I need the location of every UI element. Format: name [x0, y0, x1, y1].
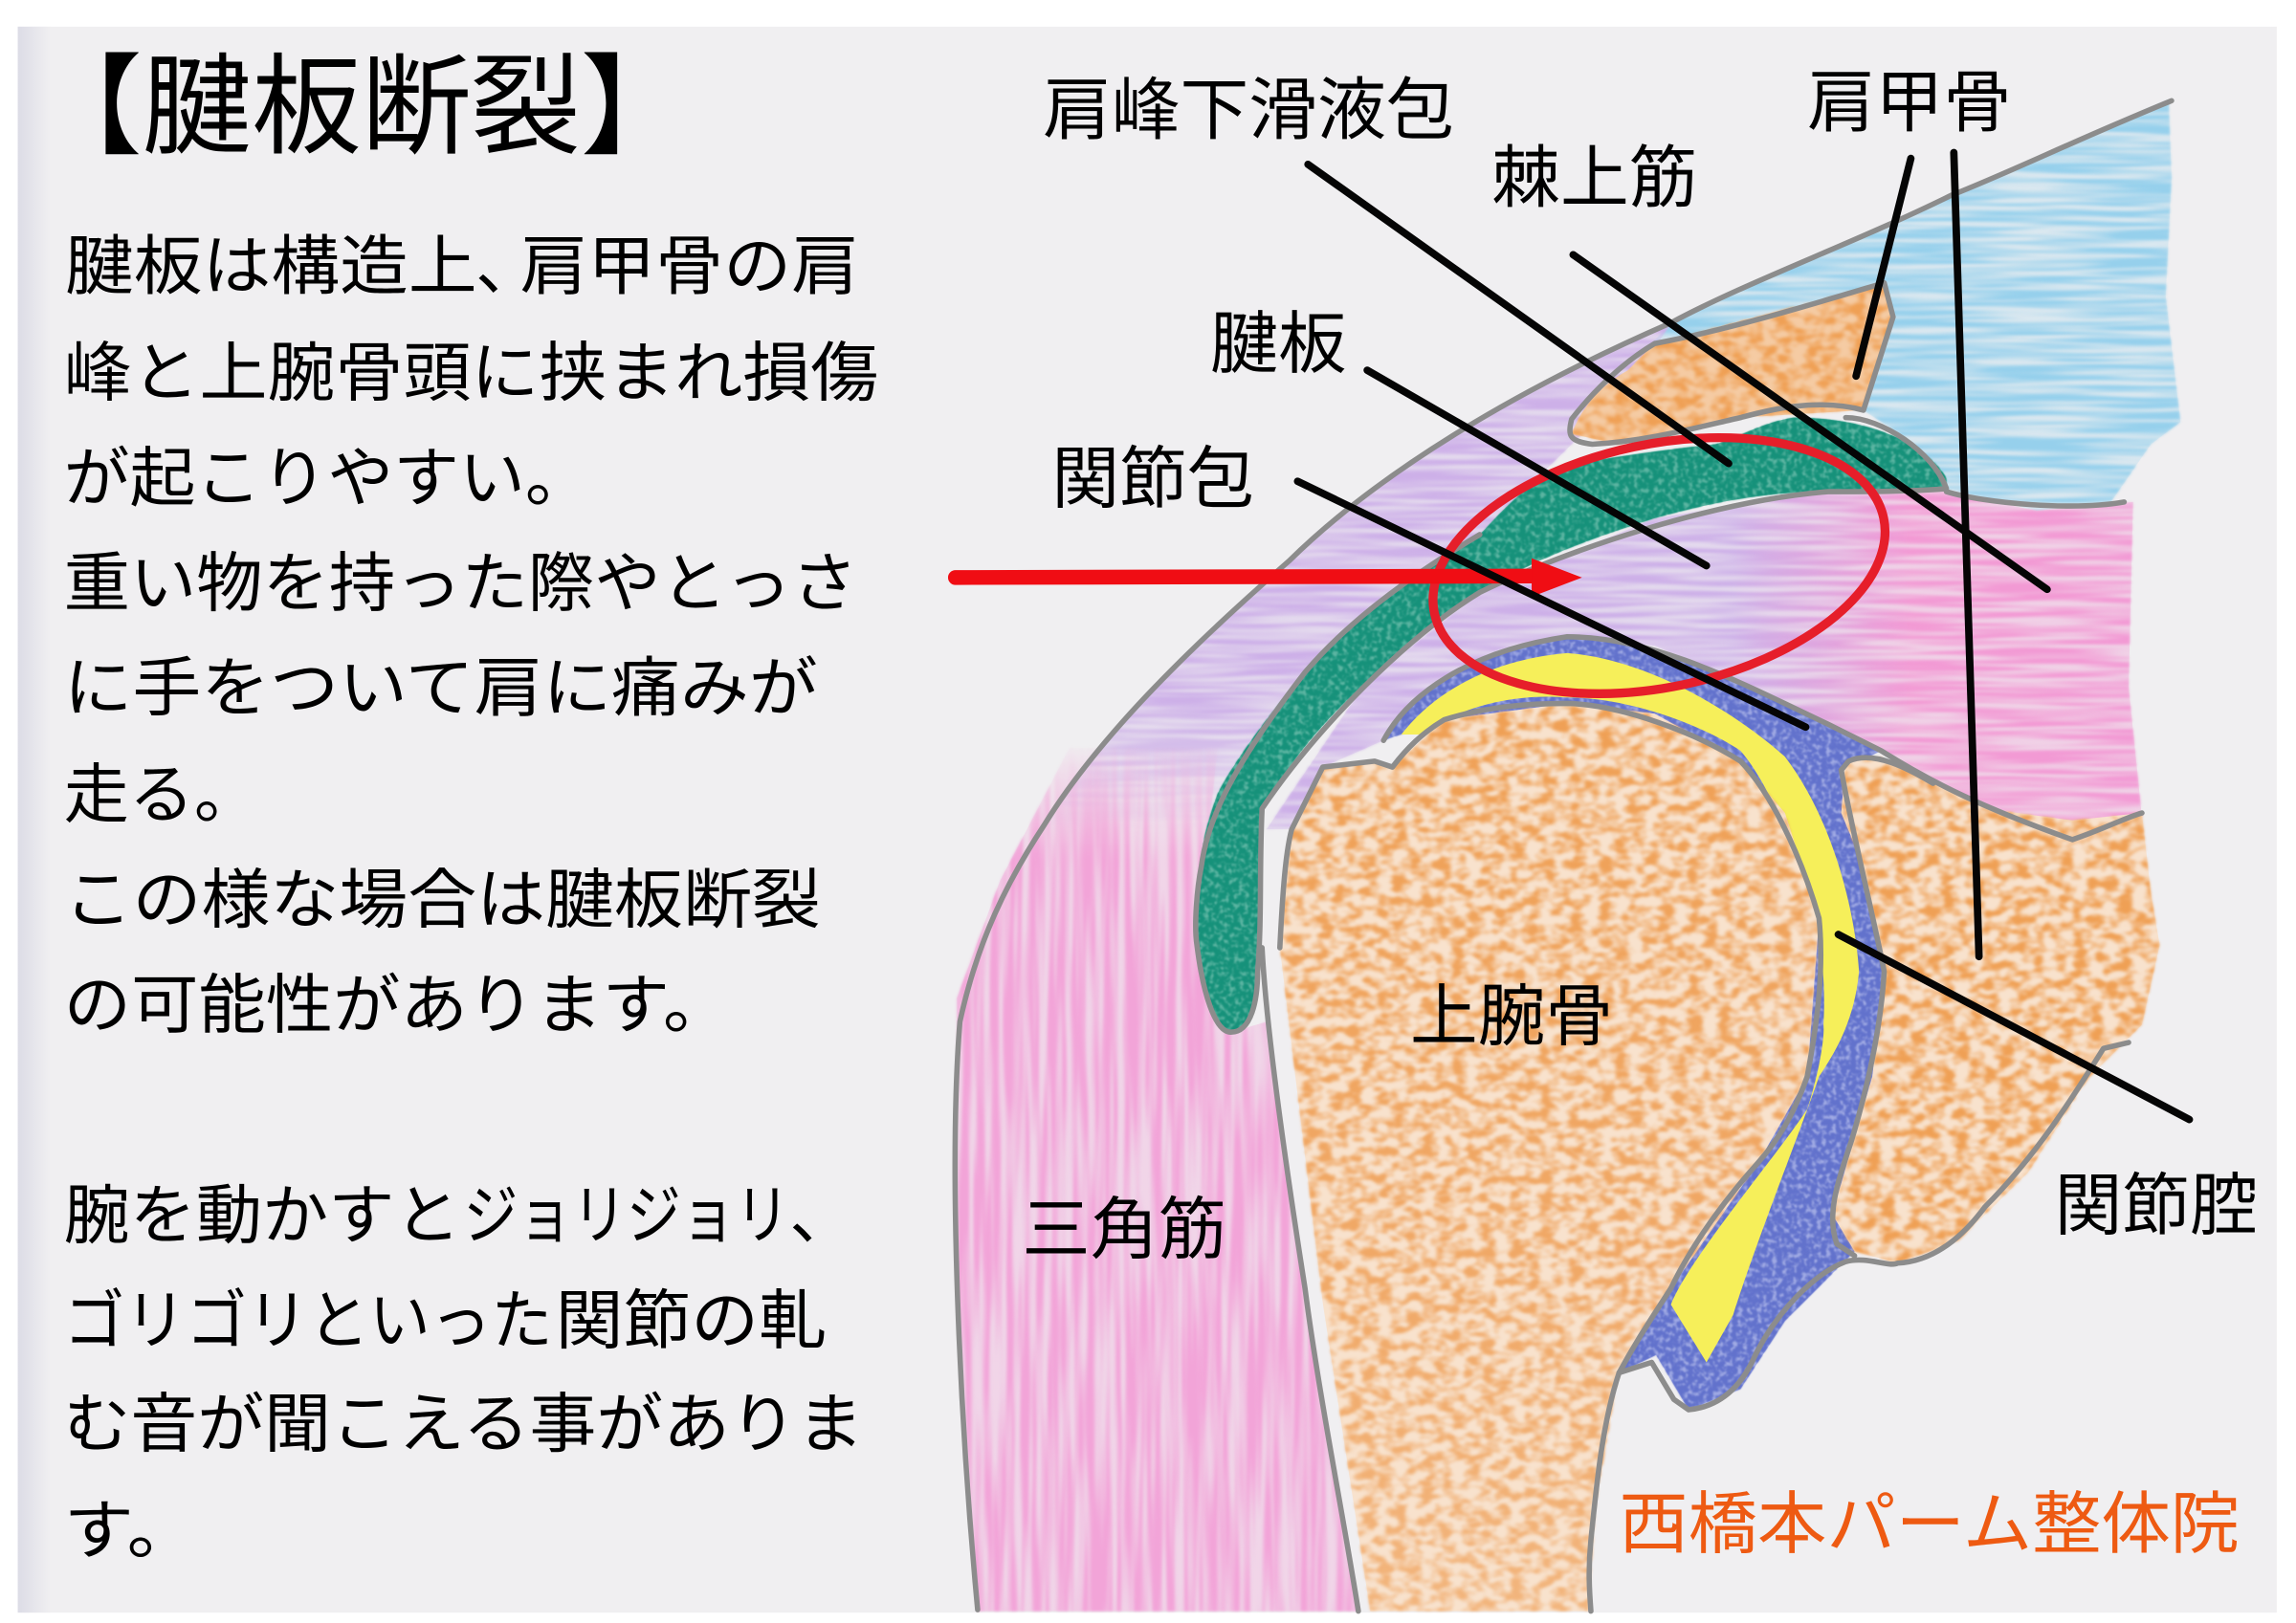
label: subacromial bursa: 肩峰下滑液包	[1043, 73, 1455, 148]
body text: explanation: に手をついて肩に痛みが	[64, 652, 818, 725]
joint cavity fluid (yellow)	[1402, 653, 1859, 1362]
label: deltoid: 三角筋	[1022, 1193, 1226, 1268]
body text: explanation: 腱板は構造上	[65, 230, 477, 303]
body text: explanation: 肩甲骨の肩	[519, 230, 859, 303]
body text: symptoms: す。	[64, 1495, 197, 1568]
body text: explanation	[64, 230, 878, 1042]
label: rotator cuff: 腱板	[1210, 307, 1346, 383]
muscle: trapezius (blue)	[1637, 100, 2180, 511]
body text: symptoms: ゴリゴリといった	[64, 1284, 553, 1357]
body text: symptoms: ジョリジョリ	[464, 1179, 789, 1252]
body text: symptoms: 、	[789, 1179, 854, 1252]
muscle: deltoid lower (pink)	[957, 748, 1358, 1612]
title: 【腱板断裂】	[33, 47, 690, 169]
leader lines	[1297, 152, 2190, 1120]
body text: explanation: この様な場合は腱板断裂	[64, 865, 821, 937]
body text: explanation: 、	[475, 230, 541, 303]
muscle: supraspinatus (purple to pink)	[1267, 492, 2142, 840]
body text: explanation: 走る。	[64, 759, 259, 832]
body text: symptoms: 腕を動かすと	[64, 1179, 461, 1252]
muscle: deltoid upper (purple)	[1022, 323, 1671, 874]
label: scapula: 肩甲骨	[1807, 66, 2012, 142]
humerus (orange)	[1280, 703, 1819, 1612]
label: joint capsule: 関節包	[1051, 442, 1254, 517]
label: joint cavity: 関節腔	[2055, 1169, 2258, 1244]
scapula glenoid (orange)	[1832, 757, 2160, 1263]
label: supraspinatus: 棘上筋	[1491, 142, 1697, 217]
body text: symptoms	[64, 1179, 864, 1568]
body text: explanation: 峰と上腕骨頭に挟まれ損傷	[64, 337, 878, 409]
body text: symptoms: む音が聞こえる事がありま	[64, 1389, 864, 1461]
label: humerus: 上腕骨	[1410, 979, 1613, 1055]
body text: explanation: の可能性があります。	[64, 970, 730, 1042]
body text: explanation: が起こりやすい。	[64, 442, 591, 515]
red ellipse highlight	[1409, 399, 1909, 733]
joint capsule (blue)	[1383, 637, 1885, 1410]
acromion (orange)	[1572, 283, 1893, 445]
clinic name: 西橋本パーム整体院	[1619, 1487, 2240, 1563]
rotator cuff tendon (green)	[1196, 418, 1947, 1032]
body text: symptoms: 関節の軋	[556, 1284, 827, 1357]
red arrow	[956, 559, 1582, 597]
shoulder anatomy diagram	[955, 100, 2180, 1612]
pencil outlines	[955, 100, 2172, 1612]
body text: explanation: 重い物を持った際やとっさ	[64, 547, 858, 620]
